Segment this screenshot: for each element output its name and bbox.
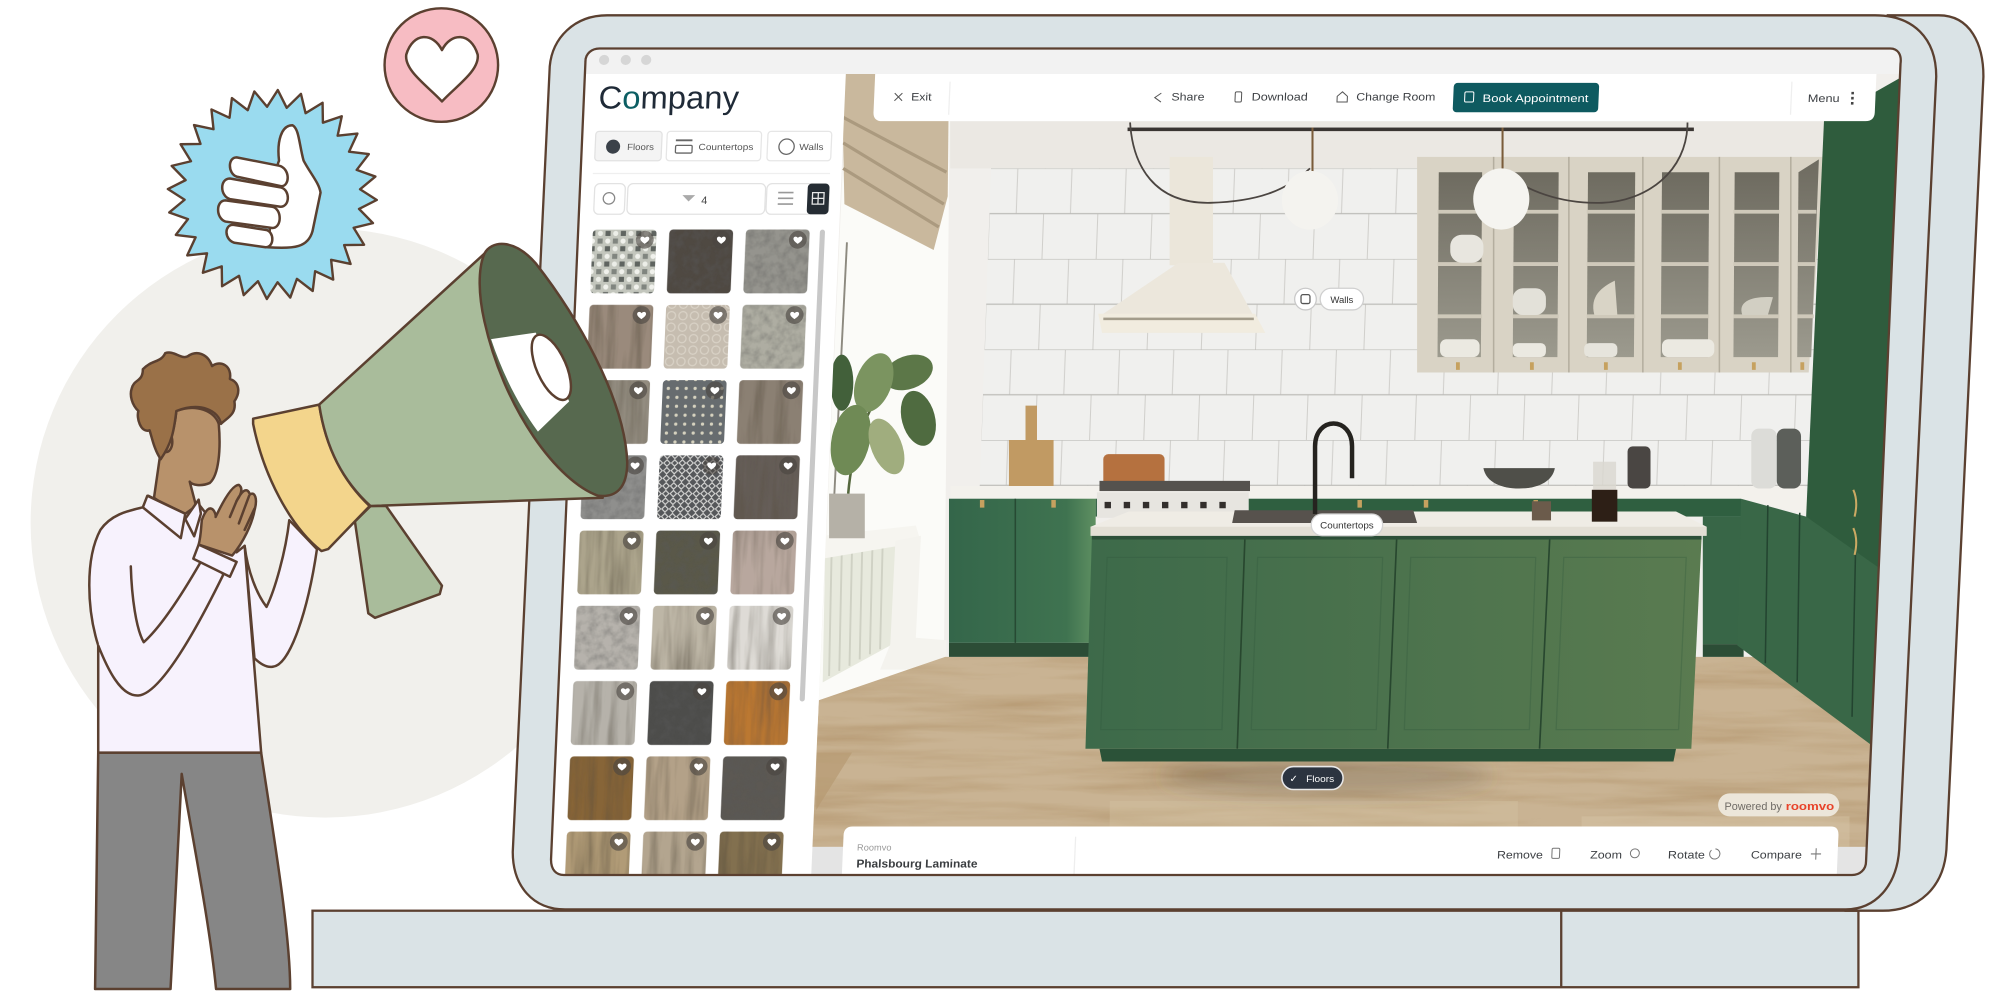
radiator [823, 526, 946, 682]
right base cabinets [1737, 499, 1888, 753]
menu [1808, 92, 1853, 105]
tab: walls: Walls [799, 142, 824, 152]
filter box [627, 184, 766, 214]
screen [537, 38, 1926, 895]
cuff [193, 545, 237, 577]
megaphone throat [524, 325, 578, 410]
monitor back shell [1846, 15, 1983, 911]
window [819, 74, 950, 700]
tab: countertops: Countertops [698, 142, 754, 152]
island [1085, 511, 1707, 761]
grey strip below floor [811, 846, 1866, 874]
view toggle [766, 184, 830, 214]
top toolbar [873, 74, 1876, 121]
swatch row 4 [580, 455, 800, 519]
hotspot: floors [1282, 767, 1343, 790]
back base cabinets [949, 499, 1744, 657]
neck and face [154, 408, 220, 520]
tab: countertops [666, 131, 762, 161]
kitchen scene [811, 74, 1913, 847]
hotspot: countertops [1311, 514, 1383, 536]
megaphone mouth [480, 244, 627, 496]
floor [811, 657, 1875, 847]
megaphone inner [491, 333, 569, 432]
book appointment button: Book Appointment [1482, 93, 1589, 105]
heart badge [385, 8, 498, 122]
bottom product bar [841, 827, 1839, 893]
compare action: Compare [1751, 849, 1802, 861]
exit: Exit [911, 92, 932, 104]
roman blind [842, 74, 949, 250]
hotspot: walls [1295, 288, 1364, 310]
swatch row 9 [564, 832, 784, 895]
thumb hand [218, 125, 321, 248]
hair [131, 353, 238, 459]
tile backsplash [980, 168, 1824, 490]
upper glass cabinets [1417, 157, 1824, 372]
swatch row 2 [587, 305, 807, 369]
sidebar divider [593, 172, 830, 174]
heart [406, 37, 478, 101]
powered by badge: roomvo [1786, 801, 1834, 813]
window frame [833, 242, 848, 494]
hotspot: floors: Floors [1306, 774, 1335, 784]
shirt torso [89, 496, 261, 753]
tab: floors: Floors [627, 142, 655, 152]
sidebar [537, 74, 846, 895]
change room: Change Room [1356, 92, 1436, 104]
monitor front bezel [513, 15, 1936, 909]
hand [199, 485, 256, 556]
copper pot [1103, 454, 1165, 481]
ear [160, 432, 172, 452]
trousers [95, 753, 290, 989]
scrollbar [800, 230, 825, 702]
swatch row 3 [584, 380, 803, 444]
monitor stand [312, 911, 1858, 987]
rotate action: Rotate [1668, 849, 1705, 861]
small glass [1532, 501, 1551, 520]
back counter [980, 486, 1805, 490]
share [1154, 92, 1205, 104]
swatch row 8 [567, 756, 787, 820]
near arm [98, 546, 223, 696]
menu: Menu [1808, 93, 1840, 105]
heart circle [385, 8, 498, 122]
zoom action: Zoom [1590, 849, 1622, 861]
tab: floors [595, 131, 662, 161]
powered by badge: Powered by [1724, 801, 1782, 813]
cooking items [1009, 406, 1801, 518]
exit [894, 92, 932, 102]
starburst [162, 85, 382, 304]
skewed interface [537, 38, 1926, 895]
far arm [245, 520, 317, 667]
pendant lamps [1128, 122, 1694, 230]
megaphone cone [319, 254, 603, 506]
swatch row 7 [571, 681, 790, 745]
hotspot: walls: Walls [1330, 295, 1354, 305]
grey bowl [1483, 468, 1555, 489]
tall green cabinet [1806, 74, 1907, 574]
rotate action [1668, 849, 1720, 861]
french press [1592, 462, 1617, 522]
remove action [1497, 848, 1560, 861]
swatch row 5 [577, 531, 797, 594]
download [1235, 92, 1308, 104]
browser chrome [586, 50, 1900, 74]
logo: Company [598, 79, 740, 115]
cutting board [1009, 406, 1054, 486]
wall [816, 74, 1913, 712]
collar [143, 496, 201, 538]
product name [856, 843, 978, 870]
floor planks [816, 753, 1849, 847]
hotspot: floors: ✓ [1290, 774, 1298, 785]
share: Share [1171, 92, 1205, 104]
product name: Phalsbourg Laminate [856, 858, 978, 870]
zoom action [1590, 849, 1640, 861]
pot plant [829, 353, 936, 538]
megaphone handle collar [253, 405, 370, 551]
cabinet floor shadow [1161, 755, 1492, 796]
powered by badge [1718, 793, 1839, 816]
megaphone grip [355, 506, 442, 618]
person with megaphone [89, 244, 627, 989]
book appointment button [1453, 83, 1599, 112]
product name: Roomvo [857, 843, 892, 853]
range hood [1098, 157, 1265, 333]
ceiling shade [950, 121, 1843, 168]
swatch row 6 [574, 606, 794, 670]
sink and faucet [1232, 423, 1417, 523]
bottles [1751, 429, 1777, 489]
thumbs up badge [162, 85, 382, 304]
stove [1097, 481, 1250, 518]
search button [594, 184, 626, 214]
swatch grid [564, 230, 810, 895]
tab: walls [767, 131, 832, 161]
swatch row 1 [590, 230, 810, 293]
compare action [1751, 848, 1821, 861]
filter box: 4 [701, 195, 708, 207]
hotspot: countertops: Countertops [1320, 521, 1374, 531]
background circle [31, 228, 620, 818]
download: Download [1251, 92, 1308, 104]
remove action: Remove [1497, 849, 1543, 861]
screen outline [551, 48, 1901, 875]
